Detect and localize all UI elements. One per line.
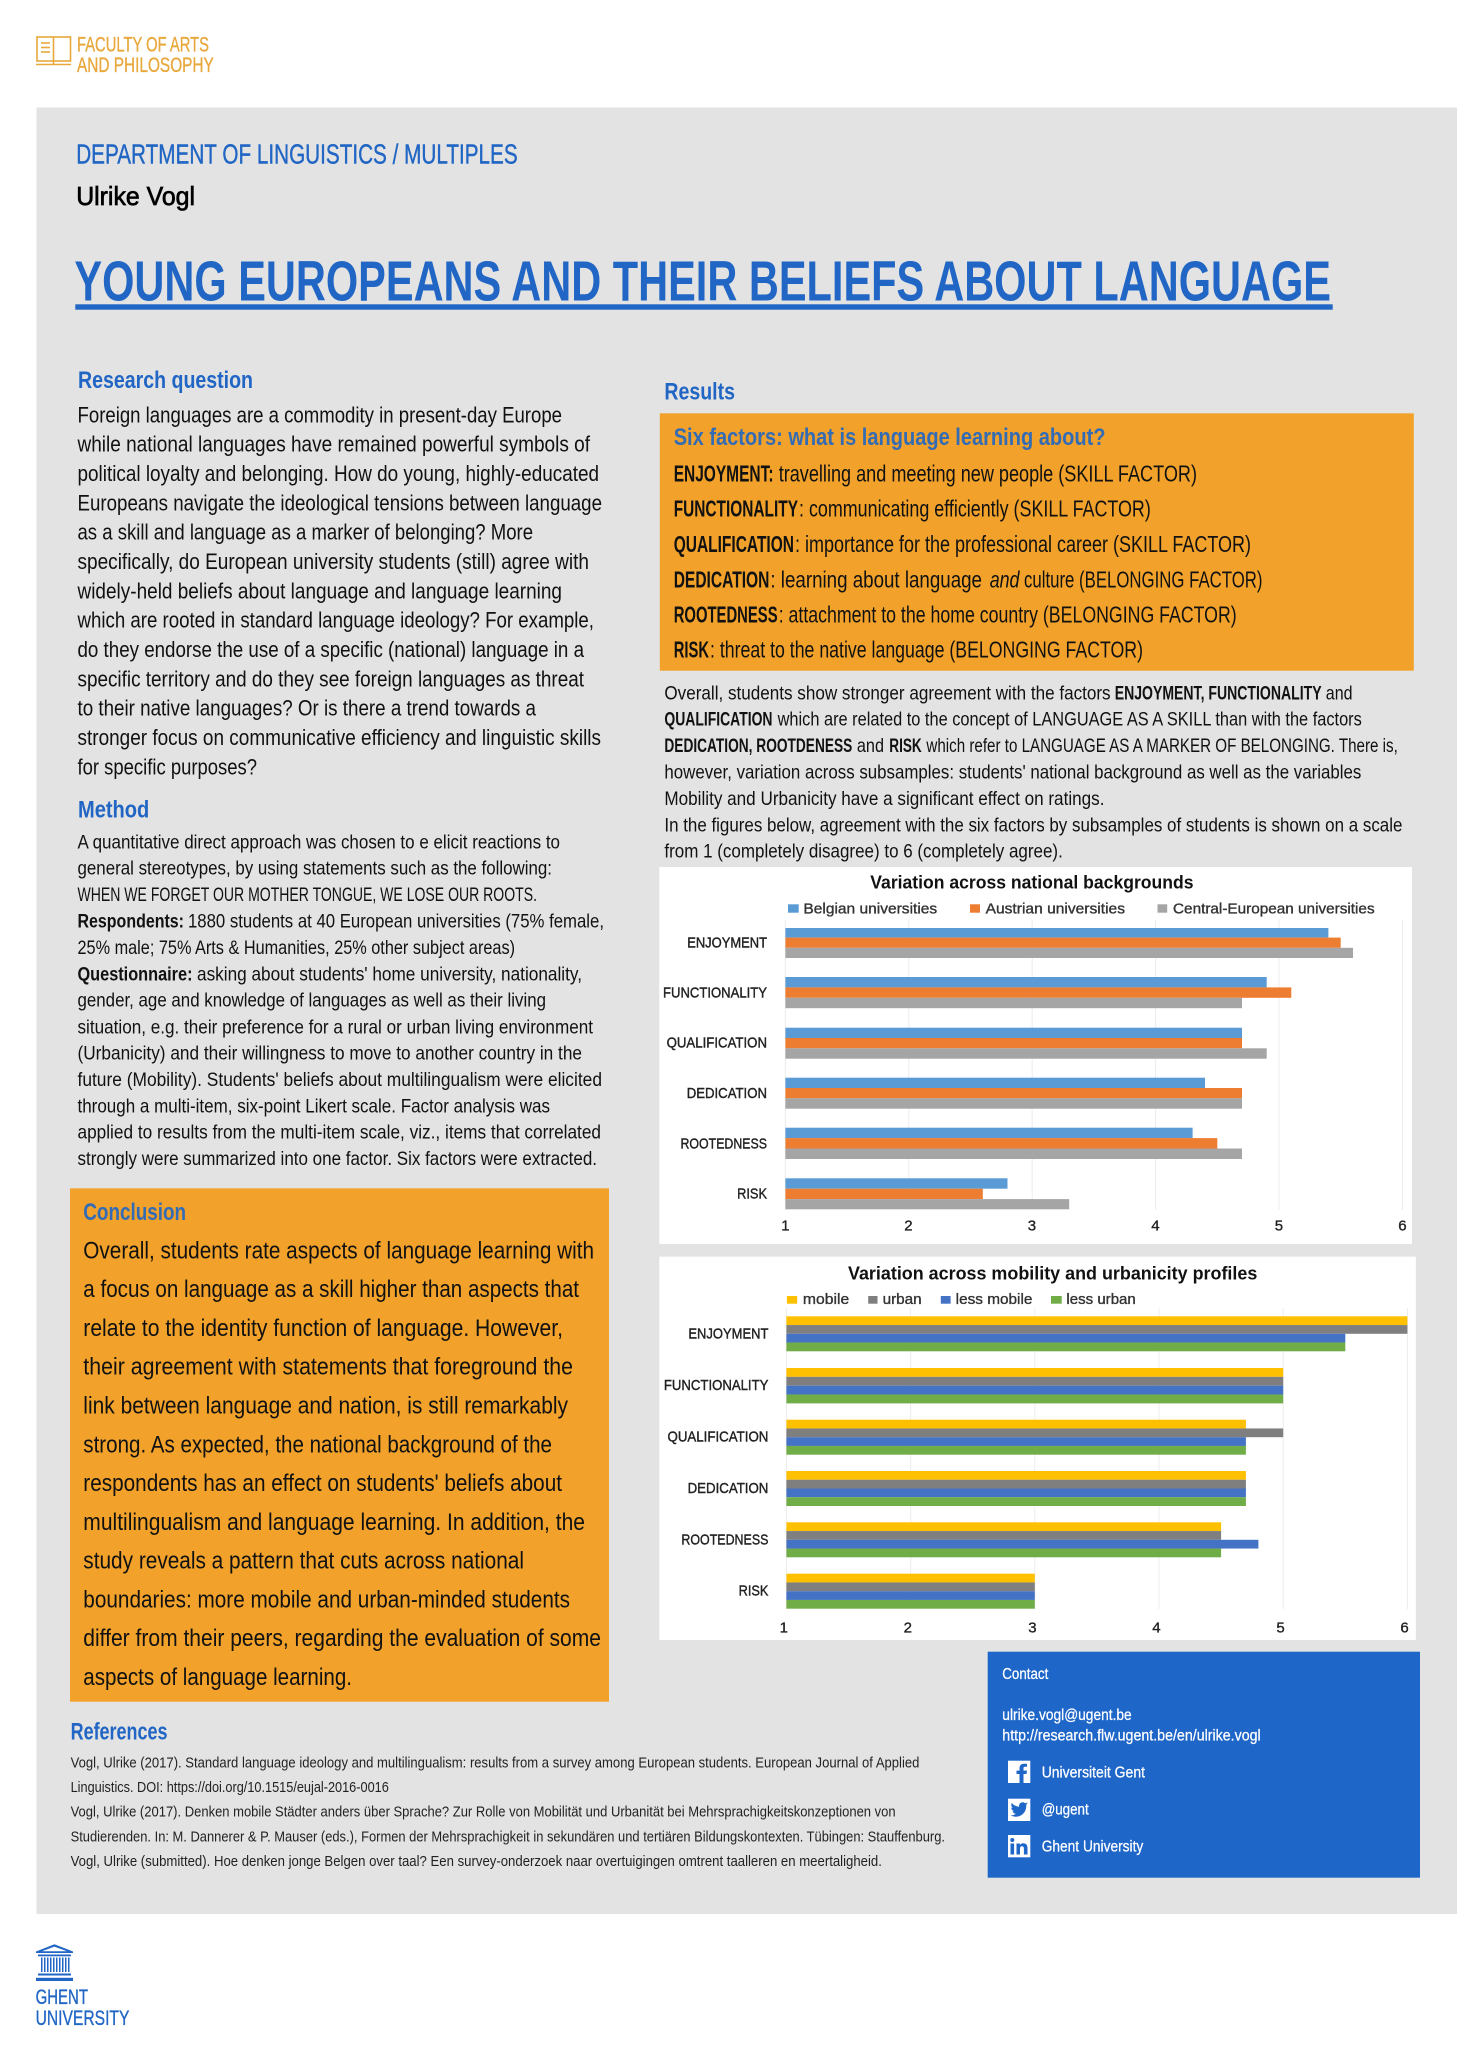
contact heading: Contact	[1002, 1666, 1049, 1683]
university name: GHENT	[36, 1985, 88, 2009]
research question text: which are rooted in standard language ideology? For example,	[77, 608, 594, 633]
axis labels: 5	[1275, 1218, 1283, 1235]
research question text: political loyalty and belonging. How do young, highly-educated	[78, 461, 599, 486]
factor: enjoyment: travelling and meeting new people (SKILL FACTOR)	[779, 461, 1197, 487]
factor: dedication: culture (BELONGING FACTOR)	[1024, 566, 1262, 592]
bar chart: mobility and urbanicity	[659, 1257, 1416, 1640]
reference list: Vogl, Ulrike (submitted). Hoe denken jonge Belgen over taal? Een survey-onderzoek naar overtuigingen omtrent taalleren en meertaligheid.	[71, 1853, 882, 1870]
factor: enjoyment	[674, 461, 1197, 487]
reference list: Linguistics. DOI: https://doi.org/10.1515/eujal-2016-0016	[71, 1779, 389, 1796]
method text: through a multi-item, six-point Likert scale. Factor analysis was	[78, 1095, 550, 1117]
results text: from 1 (completely disagree) to 6 (completely agree).	[664, 841, 1063, 863]
conclusion text: link between language and nation, is still remarkably	[83, 1392, 569, 1420]
bars: rootedness: ROOTEDNESS	[681, 1532, 768, 1548]
heading: conclusion: Conclusion	[83, 1199, 186, 1226]
research question text: as a skill and language as a marker of belonging? More	[78, 520, 533, 545]
contact details	[1002, 1707, 1261, 1745]
panel: research question	[77, 367, 602, 779]
contact details: http://research.flw.ugent.be/en/ulrike.vogl	[1002, 1728, 1261, 1745]
conclusion text: respondents has an effect on students' beliefs about	[83, 1470, 562, 1497]
bars: qualification	[667, 1028, 1267, 1059]
conclusion text: study reveals a pattern that cuts across national	[83, 1548, 524, 1575]
method text: 1880 students at 40 European universities (75% female,	[188, 911, 604, 933]
results text: Overall, students show stronger agreement with the factors	[664, 682, 1111, 704]
axis labels: 4	[1151, 1218, 1160, 1235]
heading: method: Method	[78, 796, 149, 823]
bars: rootedness: ROOTEDNESS	[680, 1136, 767, 1152]
bar chart: national backgrounds	[659, 867, 1412, 1244]
panel: contact	[988, 1652, 1420, 1878]
bars: qualification: QUALIFICATION	[667, 1036, 767, 1052]
department heading: DEPARTMENT OF LINGUISTICS / MULTIPLES	[76, 138, 518, 169]
factor: qualification	[674, 531, 1251, 557]
results text: which are related to the concept of LANGUAGE AS A SKILL than with the factors	[777, 709, 1362, 731]
factor: risk: RISK	[674, 636, 709, 662]
method text: asking about students' home university, nationality,	[197, 963, 582, 985]
axis labels: 6	[1400, 1620, 1409, 1637]
bars: enjoyment: ENJOYMENT	[688, 1327, 769, 1343]
axis labels: 4	[1152, 1620, 1161, 1637]
bars: risk: RISK	[737, 1186, 767, 1202]
method text: general stereotypes, by using statements such as the following:	[78, 858, 552, 880]
method text: 25% male; 75% Arts & Humanities, 25% other subject areas)	[78, 937, 515, 959]
conclusion text: multilingualism and language learning. In addition, the	[83, 1509, 585, 1536]
axis labels: 6	[1398, 1218, 1407, 1235]
method text: strongly were summarized into one factor. Six factors were extracted.	[78, 1148, 597, 1170]
factor: dedication: and	[990, 566, 1020, 592]
faculty name: FACULTY OF ARTS	[77, 34, 209, 57]
results text: DEDICATION, ROOTDENESS	[664, 735, 852, 757]
axis labels: 2	[904, 1218, 913, 1235]
icon: open book	[36, 37, 71, 64]
research question text: stronger focus on communicative efficiency and linguistic skills	[78, 725, 601, 750]
legend: Belgian universities	[803, 901, 937, 917]
bars: risk	[737, 1178, 1069, 1209]
bars: dedication: DEDICATION	[688, 1481, 768, 1497]
legend	[787, 1292, 1136, 1308]
bars: dedication	[688, 1471, 1246, 1506]
reference list: Vogl, Ulrike (2017). Standard language ideology and multilingualism: results from a survey among European students. European Journal of Applied	[71, 1754, 919, 1771]
method text: A quantitative direct approach was chosen to e elicit reactions to	[78, 831, 560, 853]
legend: urban	[883, 1292, 922, 1308]
factor: risk: : threat to the native language (BELONGING FACTOR)	[710, 636, 1143, 662]
research question text: to their native languages? Or is there a trend towards a	[78, 696, 537, 721]
results text: ENJOYMENT, FUNCTIONALITY	[1115, 682, 1322, 704]
bars: functionality: FUNCTIONALITY	[664, 1378, 769, 1394]
results text: Mobility and Urbanicity have a significant effect on ratings.	[664, 788, 1104, 810]
university name: UNIVERSITY	[36, 2006, 129, 2030]
method text: applied to results from the multi-item scale, viz., items that correlated	[78, 1122, 601, 1144]
bars: rootedness	[680, 1128, 1242, 1159]
method text: gender, age and knowledge of languages as well as their living	[78, 990, 546, 1012]
axis labels	[781, 1218, 1407, 1235]
heading: references: References	[71, 1718, 168, 1745]
conclusion text: their agreement with statements that foreground the	[83, 1354, 573, 1381]
chart title: Variation across mobility and urbanicity profiles	[848, 1262, 1257, 1283]
bars: enjoyment	[687, 928, 1353, 958]
chart title: Variation across national backgrounds	[870, 871, 1194, 892]
research question text	[77, 402, 602, 779]
bars: dedication	[687, 1078, 1242, 1109]
heading: results: Results	[664, 378, 735, 405]
research question text: Foreign languages are a commodity in present-day Europe	[78, 402, 562, 427]
legend: Austrian universities	[986, 901, 1125, 917]
bars: functionality: FUNCTIONALITY	[663, 986, 767, 1002]
research question text: specifically, do European university students (still) agree with	[78, 549, 589, 574]
research question text: while national languages have remained powerful symbols of	[77, 432, 591, 457]
reference list: Studierenden. In: M. Dannerer & P. Mauser (eds.), Formen der Mehrsprachigkeit in sekundären und tertiären Bildungskontexten. Tübingen: Stauffenburg.	[71, 1828, 945, 1845]
factor: dedication: : learning about language	[770, 566, 982, 592]
results text: and	[1326, 682, 1352, 704]
factor: functionality: : communicating efficiently (SKILL FACTOR)	[799, 496, 1151, 522]
reference list: Vogl, Ulrike (2017). Denken mobile Städter anders über Sprache? Zur Rolle von Mobilität und Urbanität bei Mehrsprachigkeitskonzeptionen von	[71, 1804, 896, 1821]
linkedin label: Ghent University	[1042, 1839, 1144, 1856]
legend: less mobile	[956, 1292, 1032, 1308]
panel: references	[71, 1718, 945, 1870]
factor: dedication	[674, 566, 1262, 592]
conclusion text: boundaries: more mobile and urban-minded students	[83, 1586, 570, 1613]
research question text: for specific purposes?	[78, 754, 257, 779]
bars: risk: RISK	[739, 1584, 769, 1600]
method text: situation, e.g. their preference for a rural or urban living environment	[78, 1016, 594, 1038]
axis labels: 5	[1276, 1620, 1285, 1637]
heading: research question: Research question	[78, 367, 253, 394]
icon: temple	[36, 1944, 73, 1981]
method text: Respondents:	[78, 911, 184, 933]
method text: Questionnaire:	[78, 963, 192, 985]
factor: enjoyment: ENJOYMENT:	[674, 461, 774, 487]
research question text: Europeans navigate the ideological tensions between language	[78, 490, 602, 515]
results text	[664, 682, 1402, 863]
legend: less urban	[1066, 1292, 1136, 1308]
axis labels: 2	[904, 1620, 912, 1637]
icon: twitter	[1008, 1799, 1030, 1821]
bars: dedication: DEDICATION	[687, 1086, 767, 1102]
factor: functionality: FUNCTIONALITY	[674, 496, 798, 522]
method text: future (Mobility). Students' beliefs about multilingualism were elicited	[78, 1069, 602, 1091]
axis labels: 1	[781, 1218, 790, 1235]
results text: and	[857, 735, 884, 757]
conclusion text: aspects of language learning.	[83, 1664, 352, 1691]
panel: method	[78, 796, 604, 1170]
faculty name: AND PHILOSOPHY	[77, 54, 214, 77]
axis labels: 3	[1028, 1218, 1036, 1235]
icon: linkedin	[1008, 1835, 1030, 1857]
axis labels: 3	[1028, 1620, 1037, 1637]
factor: rootedness: : attachment to the home country (BELONGING FACTOR)	[779, 601, 1237, 627]
results text: QUALIFICATION	[664, 709, 772, 731]
legend: mobile	[803, 1292, 849, 1308]
faculty logo	[36, 34, 214, 77]
conclusion text	[83, 1237, 601, 1691]
heading: six factors: Six factors: what is language learning about?	[674, 424, 1106, 451]
faculty name	[77, 34, 214, 77]
conclusion text: a focus on language as a skill higher than aspects that	[83, 1276, 579, 1303]
panel: conclusion	[70, 1188, 609, 1702]
factor: qualification: : importance for the professional career (SKILL FACTOR)	[795, 531, 1251, 557]
bars: enjoyment: ENJOYMENT	[687, 935, 767, 951]
method text: (Urbanicity) and their willingness to move to another country in the	[78, 1043, 582, 1065]
contact details: ulrike.vogl@ugent.be	[1002, 1707, 1132, 1724]
conclusion text: strong. As expected, the national background of the	[83, 1431, 552, 1458]
factor: rootedness: ROOTEDNESS	[674, 601, 778, 627]
research question text: do they endorse the use of a specific (national) language in a	[78, 637, 585, 662]
reference list	[71, 1754, 945, 1870]
bars: functionality	[664, 1368, 1283, 1403]
results text: however, variation across subsamples: students' national background as well as the variables	[664, 762, 1362, 784]
conclusion text: Overall, students rate aspects of language learning with	[83, 1237, 594, 1264]
bars: qualification	[668, 1420, 1283, 1455]
method text: WHEN WE FORGET OUR MOTHER TONGUE, WE LOSE OUR ROOTS.	[78, 884, 537, 906]
bars: enjoyment	[688, 1316, 1407, 1351]
method text	[78, 831, 604, 1170]
university name	[36, 1985, 129, 2030]
bars: risk	[739, 1574, 1035, 1609]
icon: facebook	[1008, 1761, 1030, 1783]
factor: functionality	[674, 496, 1151, 522]
research question text: widely-held beliefs about language and language learning	[77, 578, 562, 603]
university logo	[36, 1944, 129, 2030]
conclusion text: relate to the identity function of language. However,	[83, 1315, 563, 1342]
legend: Central-European universities	[1173, 901, 1375, 917]
factor: qualification: QUALIFICATION	[674, 531, 794, 557]
results text: RISK	[889, 735, 922, 757]
bars: functionality	[663, 977, 1291, 1008]
facebook label: Universiteit Gent	[1042, 1764, 1146, 1781]
bars: qualification: QUALIFICATION	[668, 1430, 768, 1446]
bars: rootedness	[681, 1522, 1258, 1557]
factor: dedication: DEDICATION	[674, 566, 769, 592]
axis labels: 1	[780, 1620, 788, 1637]
factor: rootedness	[674, 601, 1237, 627]
research question text: specific territory and do they see foreign languages as threat	[78, 666, 584, 691]
panel: six factors	[660, 413, 1414, 671]
author name: Ulrike Vogl	[76, 181, 195, 211]
axis labels	[780, 1620, 1409, 1637]
legend	[788, 901, 1375, 917]
conclusion text: differ from their peers, regarding the evaluation of some	[83, 1625, 601, 1652]
twitter label: @ugent	[1042, 1801, 1089, 1818]
